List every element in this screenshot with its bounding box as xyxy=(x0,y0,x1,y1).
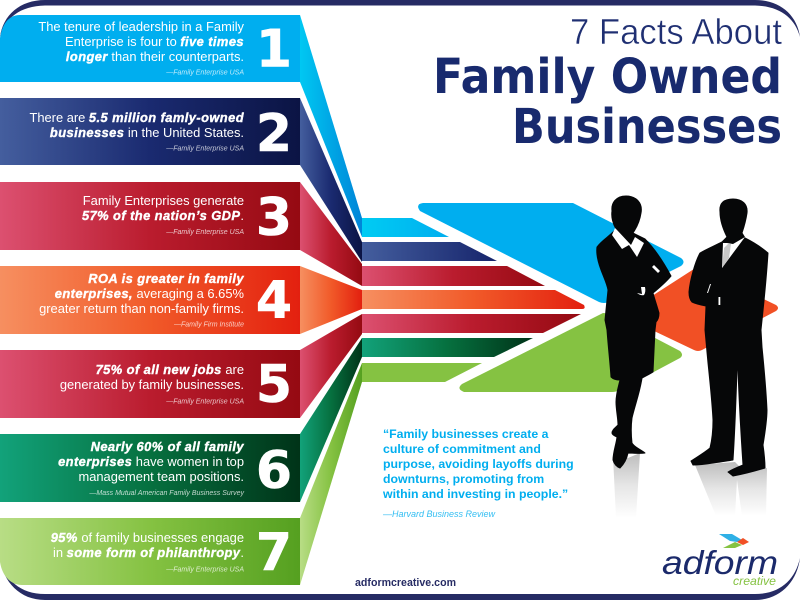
panel: fact 3: Family Enterprises generate xyxy=(83,193,244,208)
panel: fact 2: There are 5.5 million famly-owned xyxy=(29,110,245,125)
panel: fact 5: generated by family businesses. xyxy=(60,377,244,392)
panel: fact 4: ROA is greater in family xyxy=(88,271,244,286)
panel: fact 1: longer than their counterparts. xyxy=(66,49,244,64)
logo: adform creative xyxy=(662,534,778,588)
panel: fact 4 xyxy=(0,266,300,334)
quote: culture of commitment and xyxy=(383,442,541,456)
panel: fact 1 xyxy=(0,15,300,82)
panel: fact 3 xyxy=(0,182,300,250)
panel: fact 6: Nearly 60% of all family xyxy=(91,439,244,454)
silhouette: businessman xyxy=(689,199,768,476)
title xyxy=(433,11,782,155)
panel: fact 4: 4 xyxy=(256,271,292,331)
logo: adform creative: creative xyxy=(733,574,776,588)
quote xyxy=(382,427,574,519)
converging strips xyxy=(362,218,585,382)
panel: fact 1: The tenure of leadership in a Family xyxy=(38,19,245,34)
large arrow shapes xyxy=(418,203,778,392)
panel: fact 7: 95% of family businesses engage xyxy=(51,530,244,545)
panel: fact 2: 2 xyxy=(256,104,292,164)
panel: fact 5 xyxy=(0,350,300,418)
panel: fact 3: 57% of the nation’s GDP. xyxy=(82,208,244,223)
panel: fact 6: —Mass Mutual American Family Business Survey xyxy=(88,490,244,497)
panel: fact 6: management team positions. xyxy=(78,469,244,484)
panel: fact 5: —Family Enterprise USA xyxy=(165,398,244,406)
logo: adform creative: adform xyxy=(662,544,778,581)
panel: fact 2: —Family Enterprise USA xyxy=(165,146,244,152)
website url: adformcreative.com xyxy=(355,577,456,589)
panel: fact 6 xyxy=(0,434,300,502)
connector ribbons xyxy=(300,15,362,585)
title: 7 Facts About xyxy=(570,11,782,52)
quote: —Harvard Business Review xyxy=(382,509,496,519)
panel: fact 1: 1 xyxy=(256,20,292,80)
panel: fact 7: in some form of philanthropy. xyxy=(53,545,244,560)
silhouette: businesswoman xyxy=(597,196,671,468)
panel: fact 1: Enterprise is four to five times xyxy=(65,34,244,49)
panel: fact 7: 7 xyxy=(256,523,292,583)
panel: fact 4: —Family Firm Institute xyxy=(173,322,244,328)
panel: fact 5: 75% of all new jobs are xyxy=(96,362,244,377)
quote: downturns, promoting from xyxy=(383,472,544,486)
floor reflections xyxy=(613,453,767,518)
quote: purpose, avoiding layoffs during xyxy=(383,457,574,471)
panel: fact 6: 6 xyxy=(256,441,292,501)
panel: fact 4: enterprises, averaging a 6.65% xyxy=(55,286,244,301)
panel: fact 3: —Family Enterprise USA xyxy=(165,229,244,236)
panel: fact 6: enterprises have women in top xyxy=(58,454,244,469)
panel: fact 1: —Family Enterprise USA xyxy=(165,70,244,76)
panel: fact 7: —Family Enterprise USA xyxy=(165,566,244,574)
quote: within and investing in people.” xyxy=(382,487,568,501)
panel: fact 4: greater return than non-family firms. xyxy=(39,301,244,316)
panel: fact 2: businesses in the United States. xyxy=(50,125,244,140)
panel: fact 2 xyxy=(0,98,300,165)
panel: fact 3: 3 xyxy=(256,188,292,248)
panel: fact 7 xyxy=(0,518,300,585)
panel: fact 5: 5 xyxy=(256,355,292,415)
quote: “Family businesses create a xyxy=(383,427,549,441)
